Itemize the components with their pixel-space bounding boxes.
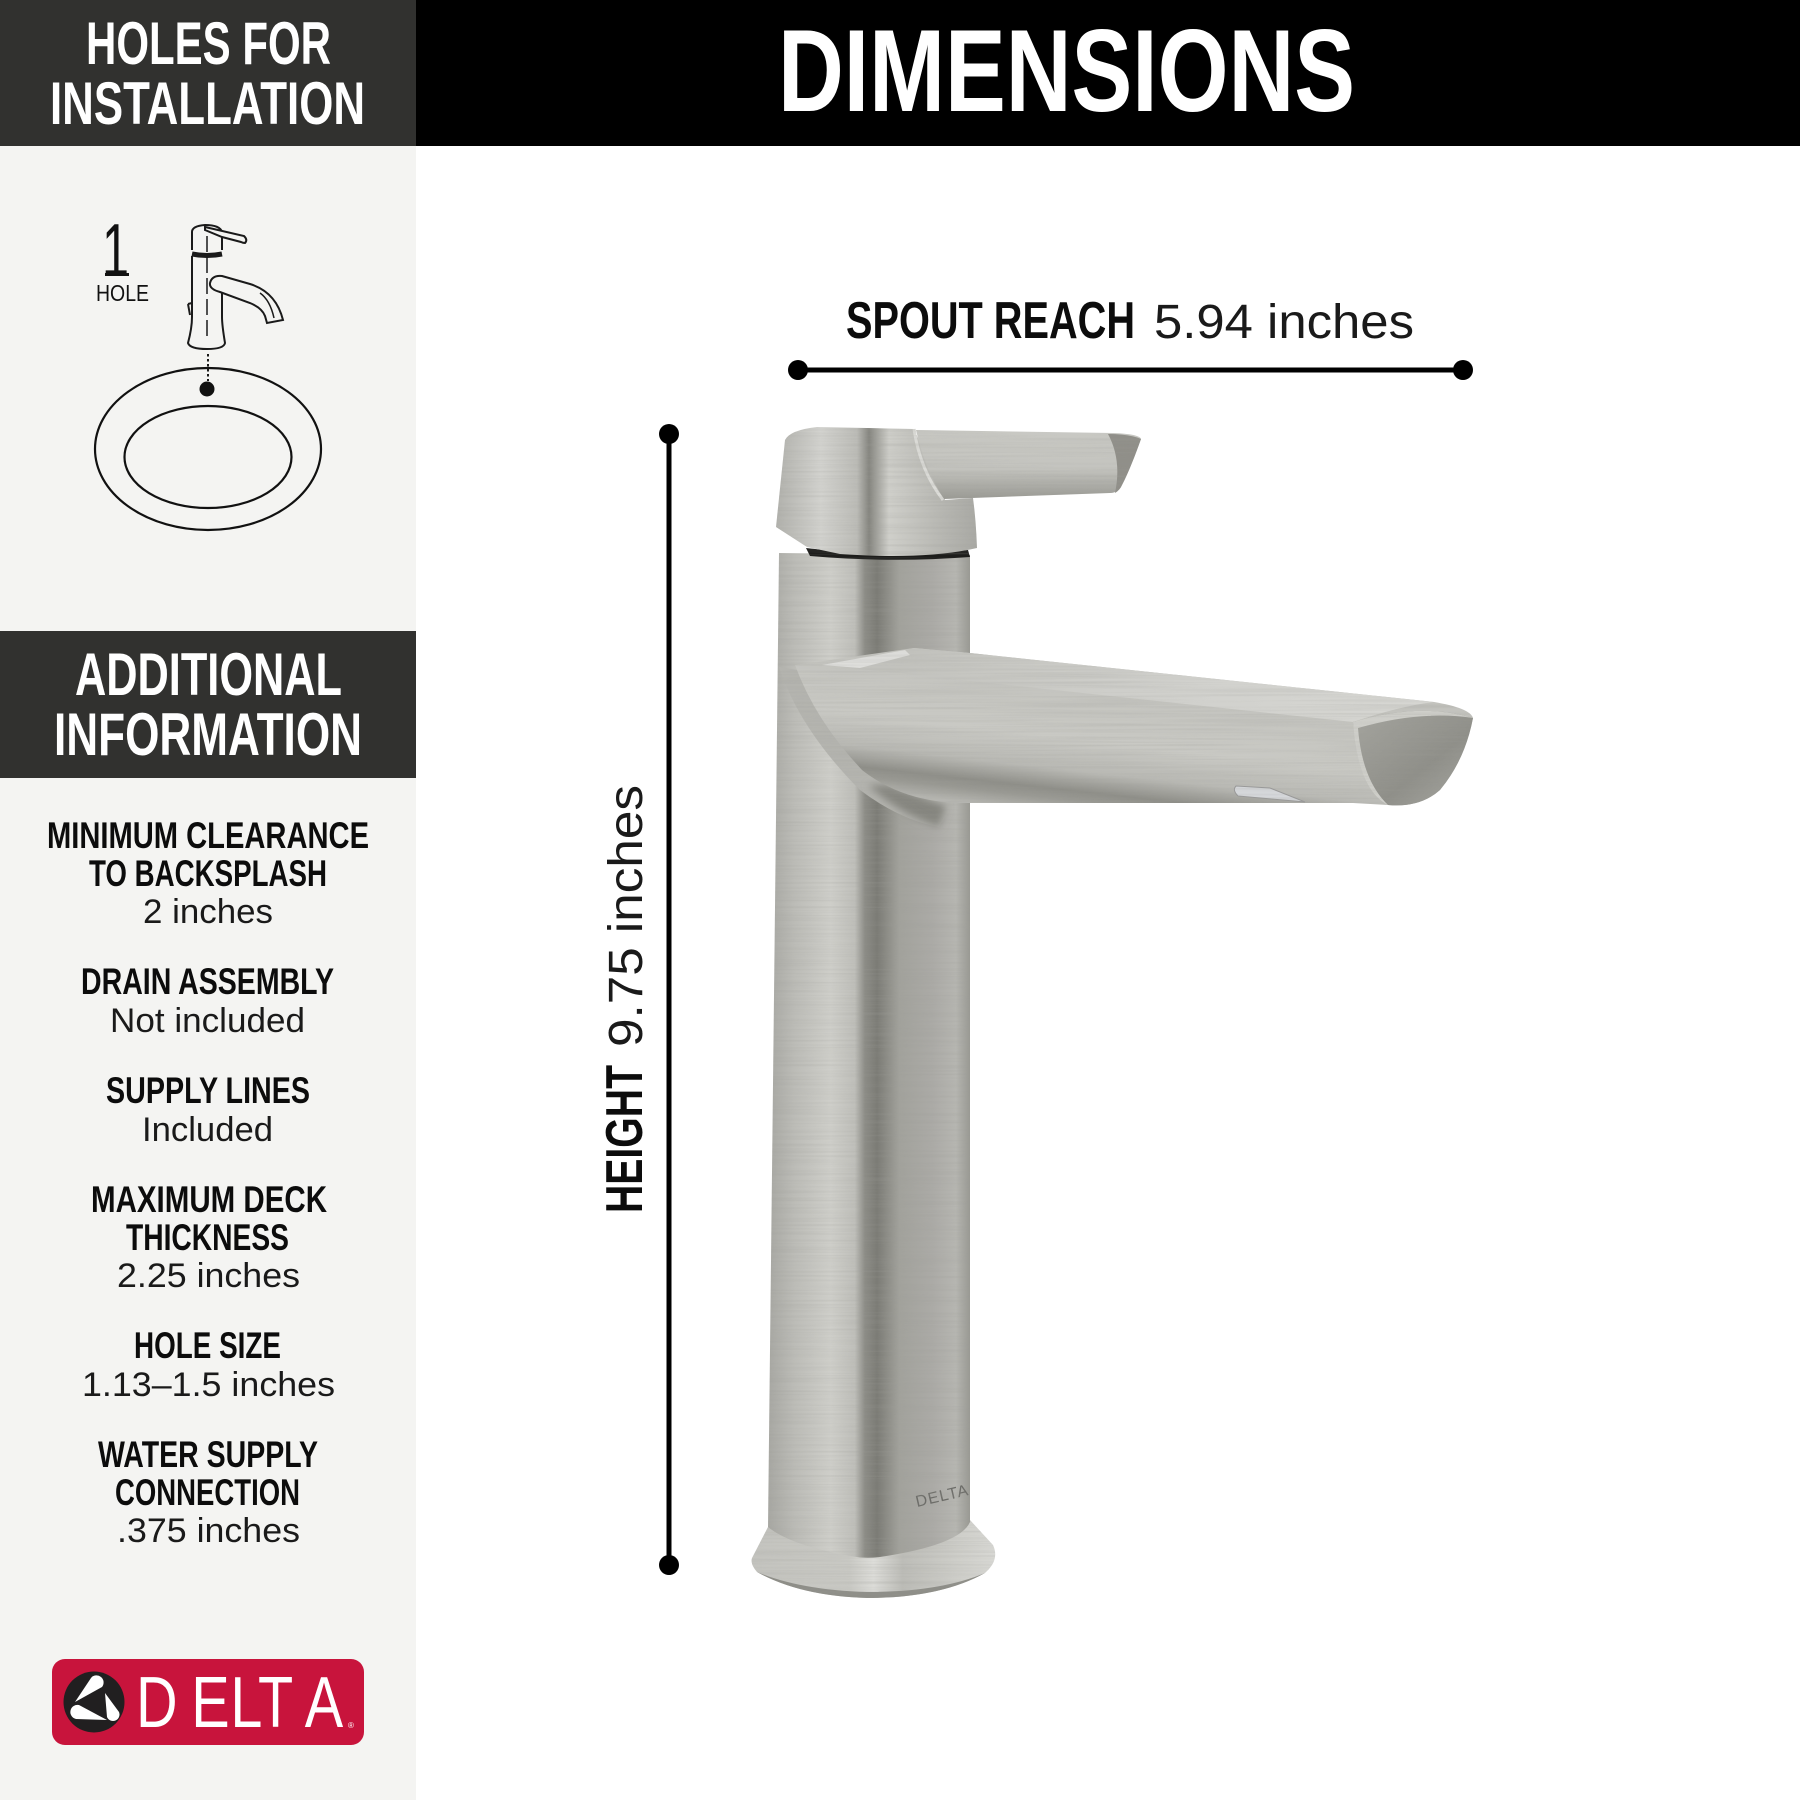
text block: minimum clearance: MINIMUM CLEARANCE: [47, 815, 369, 856]
icon: sink basin: [95, 368, 321, 530]
text block: drain assembly: DRAIN ASSEMBLY: [81, 961, 334, 1002]
text block: maximum deck thickness: THICKNESS: [126, 1217, 289, 1258]
logo: delta: DELTA: [136, 1662, 344, 1742]
arrow: spout reach line: [788, 360, 1473, 380]
text block: maximum deck thickness: MAXIMUM DECK: [91, 1179, 327, 1220]
logo: delta: ®: [348, 1721, 354, 1730]
heading: additional information: INFORMATION: [54, 701, 362, 768]
faucet lever: [916, 430, 1141, 499]
text block: water supply connection: WATER SUPPLY: [98, 1434, 318, 1475]
panel: sidebar background: [0, 0, 416, 1800]
dimension: height: [596, 424, 679, 1575]
heading: additional information: ADDITIONAL: [75, 641, 342, 708]
logo: delta: [52, 1659, 364, 1745]
faucet spout: [795, 648, 1473, 805]
text block: hole size: 1.13–1.5 inches: [82, 1366, 335, 1404]
text block: minimum clearance: TO BACKSPLASH: [89, 853, 327, 894]
dimension: height: 9.75 inches: [600, 785, 653, 1047]
faucet aerator: [1234, 786, 1305, 802]
text block: water supply connection: [98, 1434, 318, 1550]
text block: supply lines: [106, 1070, 310, 1149]
hole count: 1: [102, 208, 129, 292]
text block: hole size: HOLE SIZE: [134, 1325, 281, 1366]
text block: maximum deck thickness: [91, 1179, 327, 1295]
dimension: spout reach: SPOUT REACH: [846, 292, 1135, 350]
header bar: dimensions: [416, 0, 1800, 146]
faucet column: [768, 553, 970, 1558]
dimension: height: HEIGHT: [596, 1065, 654, 1213]
faucet spout top facet: [822, 648, 1434, 722]
text block: supply lines: SUPPLY LINES: [106, 1070, 310, 1111]
title: DIMENSIONS: [778, 5, 1355, 136]
faucet engraved brand: DELTA: [914, 1482, 971, 1511]
dimension: spout reach: 5.94 inches: [1154, 296, 1414, 349]
hole count: HOLE: [96, 280, 149, 306]
text block: water supply connection: CONNECTION: [115, 1472, 300, 1513]
dimension: spout reach: [788, 292, 1473, 380]
text block: drain assembly: [81, 961, 334, 1040]
text block: minimum clearance: [47, 815, 369, 931]
hole count: [96, 208, 149, 306]
faucet base flange: [752, 1520, 995, 1598]
heading: additional information: [0, 631, 416, 778]
icon: line faucet: [188, 225, 283, 381]
text block: supply lines: Included: [142, 1111, 273, 1149]
icon: one hole sink and faucet: [95, 208, 321, 530]
heading: holes for installation: [0, 0, 416, 146]
text block: drain assembly: Not included: [110, 1002, 305, 1040]
text block: minimum clearance: 2 inches: [143, 893, 273, 931]
text block: hole size: [82, 1325, 335, 1404]
text block: water supply connection: .375 inches: [117, 1512, 300, 1550]
faucet lever end: [1108, 434, 1141, 493]
faucet handle block: [776, 427, 977, 556]
text block: maximum deck thickness: 2.25 inches: [117, 1257, 300, 1295]
faucet spout gusset: [779, 667, 955, 827]
faucet ring: [806, 548, 970, 560]
faucet spout end cap: [1353, 711, 1473, 805]
illustration: faucet: [752, 427, 1473, 1598]
heading: holes for installation: HOLES FOR: [86, 10, 331, 77]
heading: holes for installation: INSTALLATION: [50, 70, 365, 137]
arrow: height line: [659, 424, 679, 1575]
